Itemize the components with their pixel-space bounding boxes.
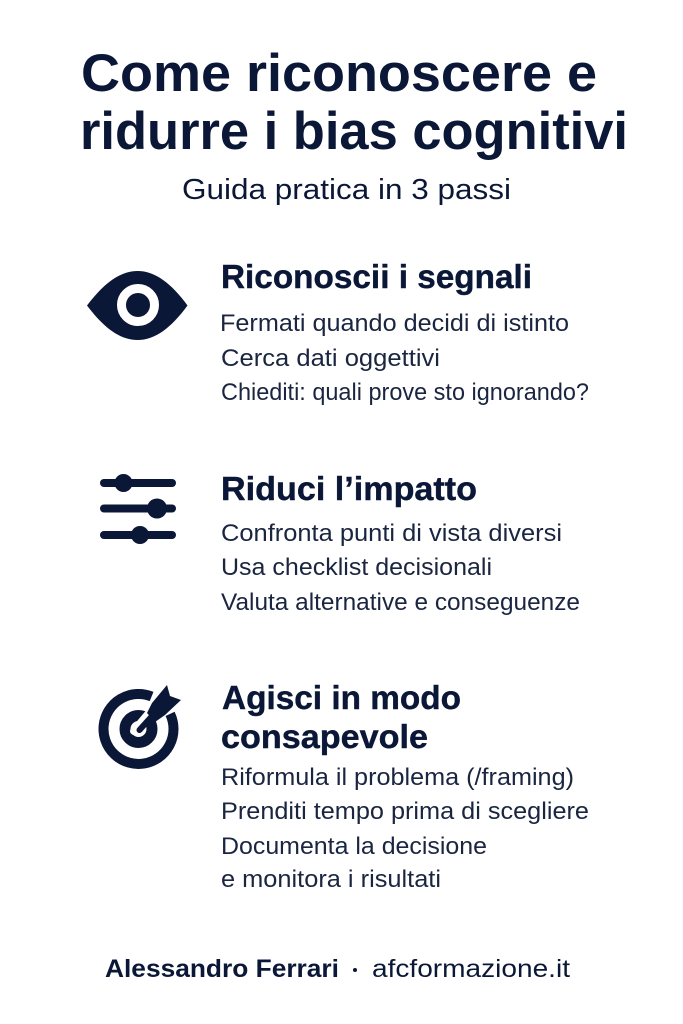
step 3 heading: Agisci in modo [222,679,461,716]
step 2 list: Usa checklist decisionali [221,554,492,581]
panel: step 2 [104,470,580,616]
separator dot [353,968,357,972]
step 1 list: Fermati quando decidi di istinto [220,310,569,337]
step 1 list: Chiediti: quali prove sto ignorando? [221,379,589,406]
step 1 list: Cerca dati oggettivi [221,345,440,372]
panel: step 1 [87,258,589,406]
footer [105,955,570,983]
step 3 list: Documenta la decisione [221,833,487,860]
icon: sliders [104,474,172,544]
step 3 heading [221,679,461,755]
panel: step 3 [104,679,589,893]
step 2 heading: Riduci l’impatto [221,470,477,507]
step 3 list: Riformula il problema (/framing) [221,764,574,791]
icon: eye [87,271,188,340]
step 2 list [221,520,580,616]
author: Alessandro Ferrari [105,955,339,983]
subtitle: Guida pratica in 3 passi [182,174,511,206]
title line 2: ridurre i bias cognitivi [80,102,628,161]
website: afcformazione.it [372,955,570,983]
step 1 heading: Riconoscii i segnali [221,258,532,295]
icon: target with arrow [104,685,181,764]
step 3 list [221,764,589,893]
step 1 list [220,310,589,406]
step 3 heading: consapevole [221,718,428,755]
step 2 list: Confronta punti di vista diversi [221,520,562,547]
step 2 list: Valuta alternative e conseguenze [221,589,580,616]
title line 1: Come riconoscere e [81,44,597,103]
header: title and subtitle [80,44,628,206]
step 3 list: Prenditi tempo prima di scegliere [221,798,589,825]
step 3 list: e monitora i risultati [221,866,441,893]
